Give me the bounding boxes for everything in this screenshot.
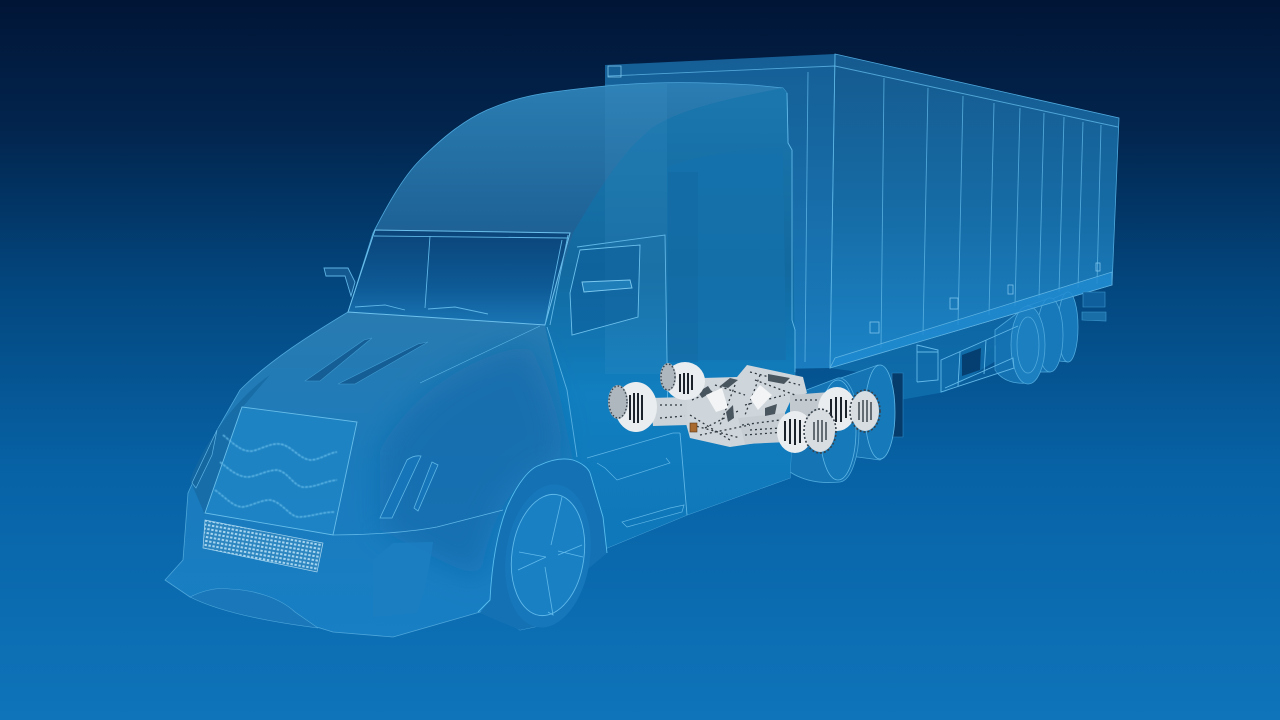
mesh grille [203,520,323,572]
housing detail [660,372,825,440]
sleeper dark column [668,172,698,362]
windshield [348,230,570,325]
side guard [917,326,1018,392]
left axle shaft [650,397,687,426]
left front brake [608,382,657,432]
cab side behind door [545,88,795,548]
arch outline [478,459,607,612]
chassis rail [830,272,1112,368]
right axle shaft [738,413,788,444]
mudflap [892,373,903,437]
hood crease [420,326,540,383]
front tyre [780,378,859,483]
tractor rear wheels [780,365,903,483]
cab [165,83,795,637]
undercarriage haze [830,310,1030,400]
side skirt [587,433,684,527]
spokes [518,497,583,615]
trailer wheels [995,292,1078,384]
copper connector [690,423,697,432]
truck silhouette [165,83,795,637]
headlight [192,430,217,488]
hood vents [305,338,428,384]
hood mirror [324,268,355,296]
side fender vent [380,456,438,518]
cab rear outline [787,93,795,372]
tail fittings [1083,292,1105,307]
left rear brake [660,362,705,400]
rim [504,490,592,620]
trailer corner fittings [608,66,1100,333]
door frame [547,235,687,515]
trailer chassis and rear wheels [830,272,1112,400]
sleeper inner panel [667,147,786,360]
dark gap in guard [962,348,981,376]
front splitter [190,589,318,628]
trailer side face [830,54,1119,368]
fender shading [380,345,561,580]
side mirror [582,280,632,292]
grille panel [205,407,357,535]
drive axle assembly [608,362,880,453]
trailer side panels [608,54,1118,368]
windshield inner frame and wipers [355,235,568,325]
front of truck [190,326,684,628]
right front brake [777,409,836,453]
white highlights [706,385,772,412]
door window [570,245,640,335]
left nose shading [190,375,270,515]
rear tyre [835,365,894,460]
housing shadows [698,374,790,422]
right rear shaft [790,392,830,420]
wheel arch [480,459,607,630]
trailer [605,54,1119,372]
central housing [685,365,807,447]
front wheel [478,459,607,633]
lower intake [373,542,433,617]
trailer front overlay [605,84,667,374]
right rear brake [818,387,880,432]
tyre [496,479,600,633]
bumper line [333,510,503,535]
trailer front face [605,54,835,372]
grille wave lines [215,435,337,517]
